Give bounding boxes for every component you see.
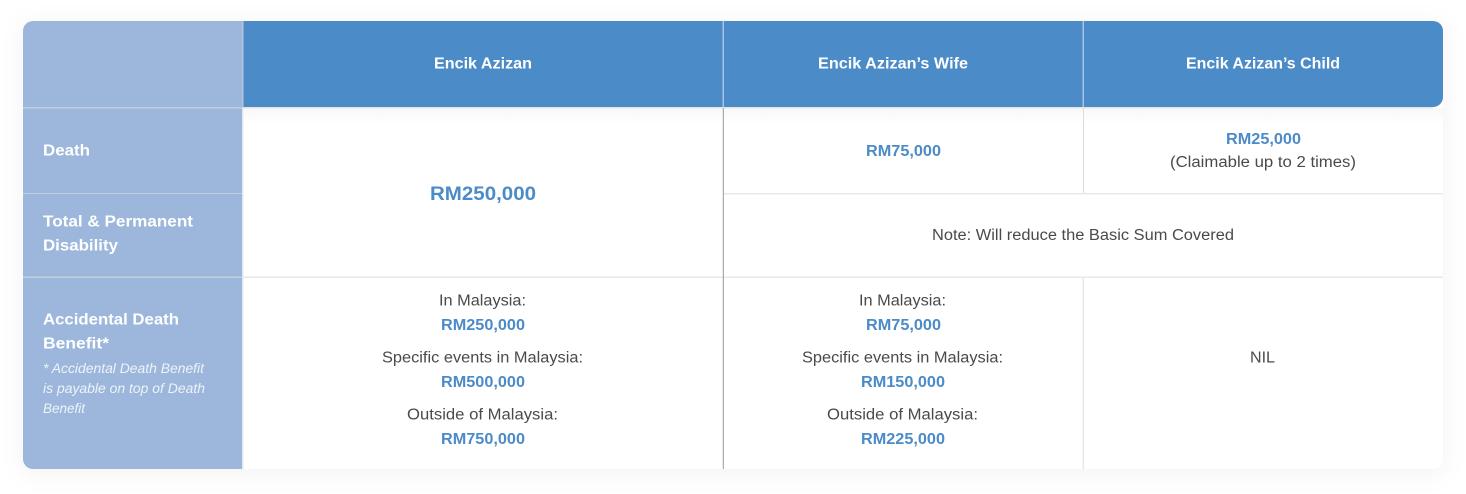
row label: Accidental Death Benefit: is payable on top of Death: [43, 381, 205, 396]
values: wife accidental death: Specific events in Malaysia:: [802, 350, 1003, 366]
row label: Total and Permanent Disability: [43, 214, 193, 254]
value: Azizan death and TPD: RM250,000: [430, 184, 536, 205]
values: Azizan accidental death: RM750,000: [441, 431, 525, 448]
values: Azizan accidental death: Specific events in Malaysia:: [382, 350, 583, 366]
values: Azizan accidental death: [382, 292, 583, 448]
values: Azizan accidental death: RM250,000: [441, 317, 525, 334]
row label: Total and Permanent Disability: Total & Permanent: [43, 214, 193, 230]
values: wife accidental death: RM150,000: [861, 374, 945, 391]
row label: Accidental Death Benefit: [43, 312, 205, 416]
row label: Accidental Death Benefit: Accidental Death: [43, 312, 179, 328]
heading: Encik Azizan's Child: Encik Azizan’s Child: [1186, 56, 1340, 72]
row label: Accidental Death Benefit: Benefit: [43, 401, 86, 416]
values: Azizan accidental death: RM500,000: [441, 374, 525, 391]
values: wife accidental death: RM225,000: [861, 431, 945, 448]
row label: Accidental Death Benefit: Benefit*: [43, 336, 110, 352]
values: Azizan accidental death: In Malaysia:: [439, 292, 526, 310]
row label: Total and Permanent Disability: Disability: [43, 238, 118, 254]
row label: Accidental Death Benefit: * Accidental Death Benefit: [43, 361, 205, 376]
values: wife accidental death: [802, 292, 1003, 448]
value: wife death: RM75,000: [866, 143, 941, 160]
heading: Encik Azizan's Wife: Encik Azizan’s Wife: [818, 56, 968, 72]
value: child death: RM25,000: [1226, 131, 1301, 148]
values: wife accidental death: In Malaysia:: [859, 292, 946, 310]
values: wife accidental death: Outside of Malaysia:: [827, 406, 978, 424]
value: child death: (Claimable up to 2 times): [1170, 154, 1356, 171]
value: child accidental death: NIL: [1250, 350, 1275, 366]
value: child death: [1170, 131, 1356, 171]
heading: Encik Azizan: Encik Azizan: [434, 56, 532, 72]
values: Azizan accidental death: Outside of Malaysia:: [407, 406, 558, 424]
note: reduces basic sum covered: Note: Will reduce the Basic Sum Covered: [932, 227, 1234, 244]
values: wife accidental death: RM75,000: [866, 317, 941, 334]
row label: Death: Death: [43, 142, 90, 160]
